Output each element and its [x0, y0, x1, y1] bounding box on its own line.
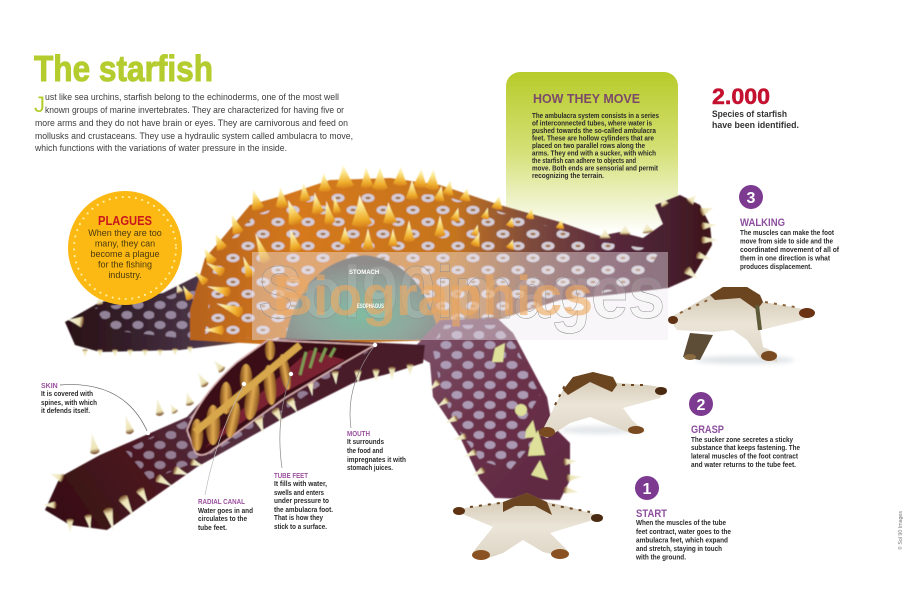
- step 3: walking: 3: [747, 190, 756, 207]
- callout: tube feet: TUBE FEET: [274, 473, 309, 480]
- intro text: mollusks and crustaceans. They use a hydraulic system called ambulacra to move,: [35, 131, 353, 142]
- small starfish: start: [453, 493, 603, 560]
- stomach: [285, 255, 440, 340]
- text: how they move body: placed on two parallel rows along the: [532, 143, 645, 150]
- statistic: 2.000 species: Species of starfish: [712, 109, 787, 120]
- callout: radial canal: Water goes in and: [198, 508, 253, 515]
- callout: tube feet: swells and enters: [274, 490, 324, 497]
- callout: mouth: impregnates it with: [347, 457, 406, 464]
- lower right arm: [410, 318, 583, 500]
- callout: plagues: many, they can: [95, 238, 155, 248]
- callout: tube feet: It fills with water,: [274, 481, 327, 488]
- label: stomach: STOMACH: [349, 270, 379, 276]
- callout: plagues: When they are too: [88, 228, 162, 238]
- starfish illustration: [42, 164, 719, 533]
- spines on the right arm tip: [599, 192, 719, 282]
- callout: tube feet: the ambulacra foot.: [274, 507, 333, 514]
- callout: tube feet: [274, 372, 333, 531]
- lower left arm: [42, 338, 425, 533]
- step 2: grasp: 2: [697, 397, 706, 414]
- callout: mouth: MOUTH: [347, 431, 370, 438]
- callout: tube feet: That is how they: [274, 515, 323, 522]
- text: how they move body: pushed towards the so-called ambulacra: [532, 128, 656, 135]
- callout: radial canal: circulates to the: [198, 516, 247, 523]
- step 3: walking: them in one direction is what: [740, 256, 831, 262]
- callout: skin: [41, 383, 150, 435]
- callout: mouth: [347, 343, 406, 472]
- text: how they move body: move. Both ends are sensorial and permit: [532, 166, 659, 172]
- text: how they move body: arms. They end with a sucker, with which: [532, 150, 656, 158]
- text: how they move body: The ambulacra system consists in a series: [532, 113, 659, 120]
- statistic: 2.000 species: have been identified.: [712, 120, 799, 131]
- image credit: © Sol 90 Images: [897, 510, 904, 550]
- text: how they move body: the starfish can adhere to objects and: [532, 158, 636, 165]
- callout: radial canal: tube feet.: [198, 525, 227, 532]
- step 1: start: START: [636, 508, 667, 520]
- callout: radial canal: RADIAL CANAL: [198, 499, 246, 506]
- central body and right arm: [179, 164, 719, 345]
- callout: plagues: [68, 191, 182, 305]
- step 1: start: ambulacra feet, which expand: [636, 538, 728, 544]
- step 3: walking: [739, 185, 840, 271]
- step 3: walking: move from side to side and the: [740, 238, 833, 246]
- step 1: start: 1: [643, 481, 652, 498]
- text: how they move body: recognizing the terrain.: [532, 173, 604, 180]
- label: esophagus: ESOPHAGUS: [357, 304, 384, 310]
- small starfish: walking: [668, 287, 815, 364]
- intro text: which functions with the variations of water pressure in the inside.: [34, 143, 287, 154]
- text: how they move body: [532, 113, 659, 180]
- step 2: grasp: and water returns to the tube feet.: [691, 462, 796, 469]
- callout: skin: It is covered with: [41, 391, 93, 398]
- ambulacral cutaway with tube feet: [187, 340, 375, 455]
- step 3: walking: The muscles can make the foot: [740, 230, 835, 237]
- callout: skin: SKIN: [41, 383, 58, 390]
- watermark: outlined wordmark: Sol90images: [258, 251, 665, 334]
- callout: tube feet: stick to a surface.: [274, 524, 327, 531]
- step 2: grasp: [689, 392, 800, 469]
- step 2: grasp: GRASP: [691, 424, 724, 436]
- watermark band: [252, 251, 668, 340]
- step 2: grasp: substance that keeps fastening. The: [691, 445, 800, 452]
- small starfish: grasp: [539, 372, 667, 438]
- intro text: ust like sea urchins, starfish belong to the echinoderms, one of the most well: [45, 92, 339, 103]
- step 3: walking: produces displacement.: [740, 264, 812, 271]
- text: how they move body: feet. These are hollow cylinders that are: [532, 136, 654, 142]
- step 1: start: and stretch, staying in touch: [636, 546, 722, 553]
- callout: skin: it defends itself.: [41, 408, 90, 415]
- callout: plagues: become a plague: [90, 249, 160, 259]
- intro text: [34, 92, 353, 154]
- heading: how they move: HOW THEY MOVE: [533, 91, 640, 106]
- callout: mouth: It surrounds: [347, 439, 384, 446]
- step 2: grasp: lateral muscles of the foot contract: [691, 454, 799, 460]
- step 2: grasp: The sucker zone secretes a sticky: [691, 437, 793, 444]
- step 1: start: feet contract, water goes to the: [636, 529, 731, 536]
- statistic: 2.000 species: [712, 84, 799, 131]
- intro text: more arms and they do not have brain or eyes. They are carnivorous and feed on: [35, 118, 348, 129]
- step 3: walking: WALKING: [740, 217, 785, 229]
- intro text: J: [34, 92, 45, 117]
- panel: how they move: [506, 72, 678, 262]
- step 1: start: [635, 476, 731, 562]
- callout: skin: spines, with which: [41, 400, 97, 407]
- callout: plagues: industry.: [108, 270, 142, 280]
- step 3: walking: coordinated movement of all of: [740, 247, 840, 254]
- callout: plagues: PLAGUES: [98, 214, 152, 228]
- callout: radial canal: [198, 382, 253, 532]
- callout: tube feet: under pressure to: [274, 498, 329, 505]
- callout: mouth: the food and: [347, 448, 383, 455]
- callout: plagues: for the fishing: [98, 260, 152, 270]
- statistic: 2.000 species: 2.000: [712, 84, 770, 109]
- watermark: orange wordmark: Biographics: [273, 264, 593, 327]
- title: The starfish: [34, 48, 213, 89]
- step 1: start: with the ground.: [635, 554, 686, 562]
- step 1: start: When the muscles of the tube: [636, 520, 726, 527]
- callout: mouth: stomach juices.: [347, 465, 393, 472]
- text: how they move body: of interconnected tubes, where water is: [532, 120, 652, 128]
- spines on the body: [179, 164, 566, 335]
- intro text: known groups of marine invertebrates. They are characterized for having five or: [45, 105, 344, 116]
- left arm: [65, 272, 260, 357]
